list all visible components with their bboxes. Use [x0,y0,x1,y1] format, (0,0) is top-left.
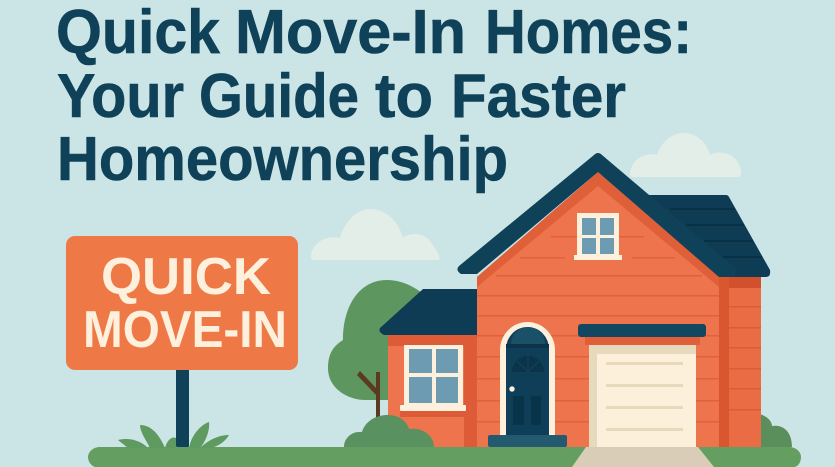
left wing wall [388,335,477,447]
title: Homeownership [57,125,508,194]
main wall siding [477,236,719,422]
garage awning [585,335,700,345]
title: Homes: [485,0,692,67]
tree trunk [357,371,380,418]
right wing wall [719,277,761,447]
gable trim [477,172,719,287]
house [380,153,770,447]
right roof shingle lines [670,208,762,258]
sign text [83,248,287,359]
title: Your [57,62,184,131]
sign board [66,236,298,370]
tree [328,280,430,418]
gable window [574,213,622,260]
sign text: QUICK [101,248,271,306]
title: Faster [451,62,626,131]
title: Guide [199,62,359,131]
main wall [477,172,719,447]
cloud: right [630,133,741,177]
cloud: left [311,209,439,260]
title [56,0,692,194]
sign [66,236,298,447]
grass tuft at sign post [118,422,229,448]
garage door [589,345,696,447]
bush: left of house [344,415,434,447]
main roof [457,153,737,277]
right wing siding [729,306,761,410]
ground [88,447,801,467]
sign text: MOVE-IN [83,301,287,359]
door [500,322,555,435]
sign post [176,368,189,447]
right roof [640,195,770,277]
left wing roof [380,289,477,335]
door step [488,435,567,447]
driveway [572,447,714,467]
title: Quick [56,0,220,67]
title: to [375,62,433,131]
left window [400,345,466,411]
bush: right of house [755,413,792,447]
title: Move-In [235,0,466,67]
